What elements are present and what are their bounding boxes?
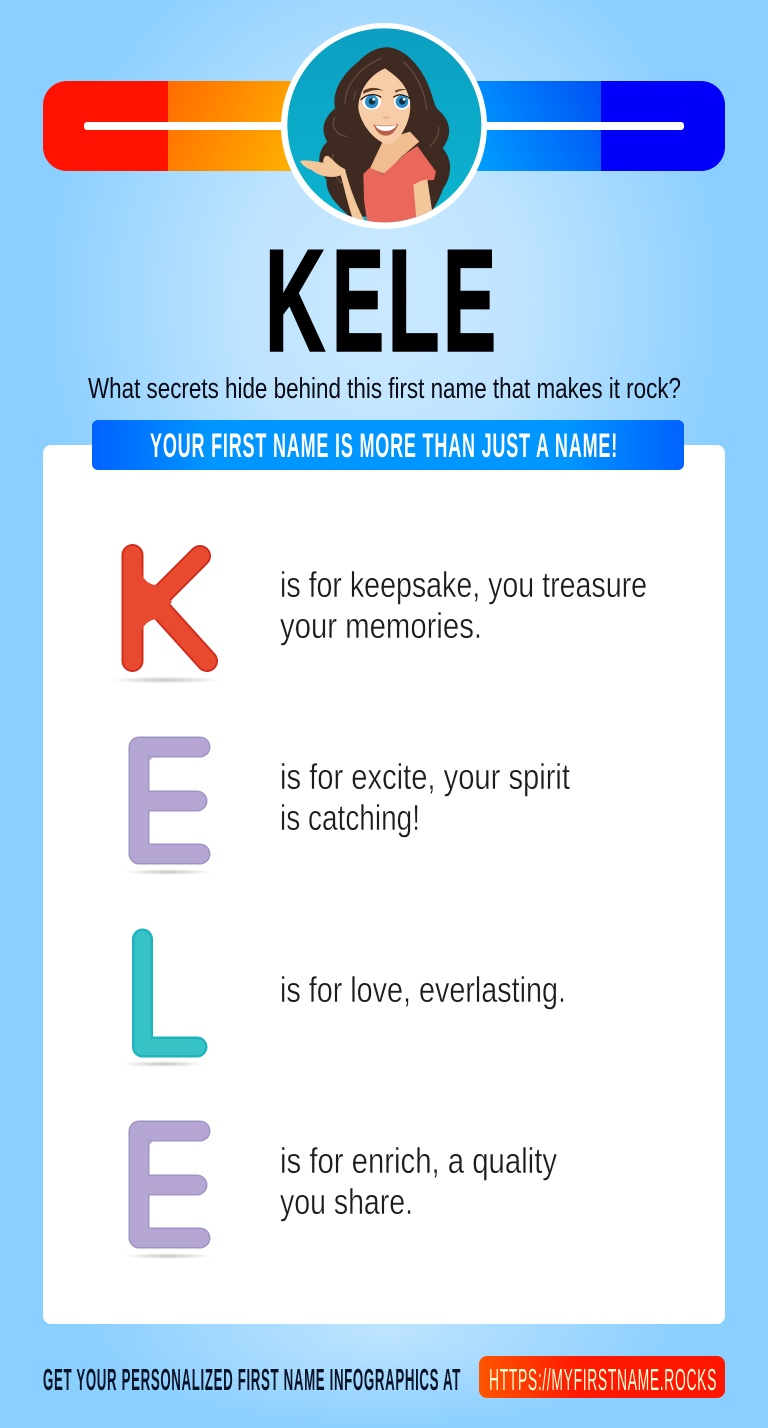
text: L line: is for love, everlasting. — [280, 969, 566, 1010]
text: E second line: is for enrich, a quality — [280, 1140, 557, 1181]
icon: letter E second — [124, 1131, 212, 1259]
banner — [92, 420, 684, 470]
header colour bar — [43, 81, 725, 171]
portrait: cartoon woman in circle — [281, 23, 487, 229]
panel: white content card — [43, 445, 725, 1324]
text: E line: is catching! — [280, 797, 420, 838]
row: letter E — [124, 747, 570, 875]
title: E — [443, 220, 496, 382]
icon: eyes — [361, 94, 411, 110]
row: letter L — [121, 939, 566, 1067]
title: L — [388, 220, 440, 382]
icon: eyebrows — [363, 88, 383, 94]
icon: face — [358, 68, 410, 144]
icon: neck — [370, 132, 419, 174]
title: K — [265, 220, 325, 382]
icon: arm and hand — [300, 156, 365, 222]
title: E — [332, 220, 384, 382]
icon: shirt — [363, 146, 436, 223]
title — [265, 220, 496, 382]
icon: letter K — [110, 555, 222, 684]
row: letter K — [110, 555, 647, 684]
row: letter E second — [124, 1131, 557, 1259]
footer url button — [479, 1356, 725, 1398]
text: K line: your memories. — [280, 605, 482, 646]
text: E line: is for excite, your spirit — [280, 756, 570, 797]
text: K line — [280, 564, 647, 646]
text: E second line: you share. — [280, 1181, 413, 1222]
icon: other arm — [413, 179, 432, 217]
icon: letter E — [124, 747, 212, 875]
icon: mouth — [373, 124, 398, 136]
icon: hair fringe — [356, 64, 385, 98]
icon: nose — [382, 117, 391, 119]
text: K line: is for keepsake, you treasure — [280, 564, 647, 605]
text: E line — [280, 756, 570, 838]
icon: hair — [319, 47, 450, 217]
icon: hair highlights — [332, 58, 439, 183]
icon: letter L — [121, 939, 205, 1067]
text: E second line — [280, 1140, 557, 1222]
